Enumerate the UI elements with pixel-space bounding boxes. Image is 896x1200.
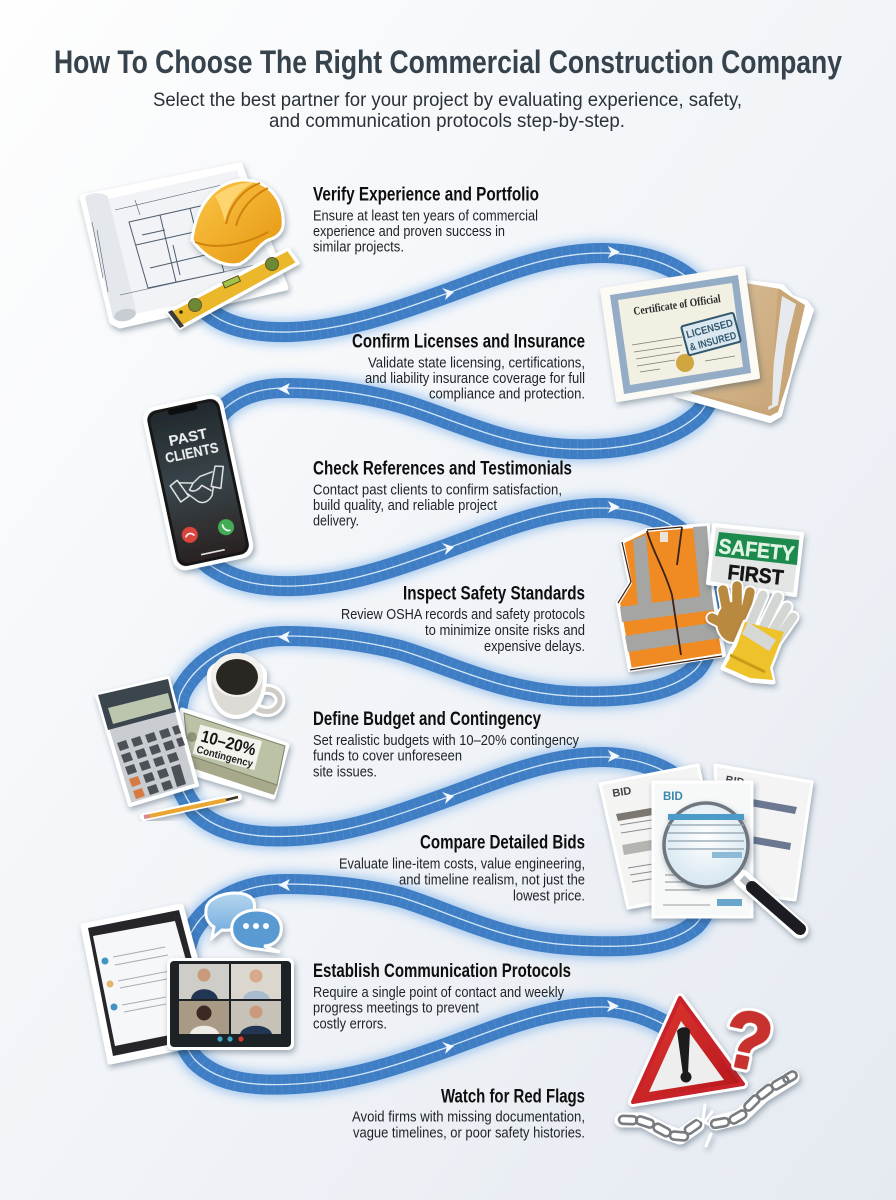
- heading: Inspect Safety Standards: [403, 583, 585, 604]
- safety first sign: [708, 525, 802, 595]
- description: progress meetings to prevent: [313, 1000, 480, 1017]
- handshake: [168, 464, 230, 508]
- safety first sign: FIRST: [726, 561, 785, 590]
- certificate title: Certificate of Official: [633, 293, 721, 318]
- question mark: ?: [716, 992, 780, 1089]
- description: [339, 855, 585, 904]
- question mark: ?: [716, 992, 780, 1089]
- description: lowest price.: [513, 887, 585, 904]
- folders: [675, 282, 812, 421]
- description: funds to cover unforeseen: [313, 748, 462, 765]
- right bid sheet: BID: [725, 774, 745, 789]
- stamp: & INSURED: [688, 330, 738, 354]
- cash stack: [182, 710, 287, 797]
- description: expensive delays.: [484, 638, 585, 655]
- calculator: [97, 678, 197, 805]
- stamp: [681, 313, 741, 355]
- description: [313, 984, 564, 1032]
- contingency label: 10–20%: [199, 727, 258, 759]
- phone text: [160, 424, 220, 467]
- certificate: [602, 268, 758, 400]
- icon: blueprint, hard hat and level: [82, 165, 298, 328]
- description: [313, 481, 562, 529]
- warning triangle: [633, 998, 743, 1102]
- icon: warning sign, question mark and broken chain: [619, 992, 798, 1146]
- left bid sheet: [600, 765, 725, 908]
- description: vague timelines, or poor safety histories.: [353, 1125, 585, 1142]
- heading: Define Budget and Contingency: [313, 709, 541, 730]
- description: [313, 208, 538, 256]
- winding blueprint path: [174, 253, 716, 1085]
- description: [365, 354, 585, 402]
- step 8: red flags: [352, 992, 798, 1146]
- description: Ensure at least ten years of commercial: [313, 208, 538, 225]
- pencil: [144, 797, 238, 817]
- spirit level: [168, 249, 298, 328]
- description: Validate state licensing, certifications,: [368, 354, 585, 371]
- broken chain: [619, 1070, 798, 1146]
- step 4: inspect safety: [341, 525, 802, 682]
- heading: Watch for Red Flags: [441, 1086, 585, 1107]
- right bid sheet: [715, 765, 812, 900]
- step 1: verify experience: [82, 165, 539, 328]
- left bid sheet: BID: [612, 785, 632, 800]
- step 5: define budget: [97, 653, 579, 817]
- description: [341, 606, 585, 655]
- description: Review OSHA records and safety protocols: [341, 606, 585, 623]
- heading: Establish Communication Protocols: [313, 961, 571, 982]
- icon: calculator, coffee, cash and pencil: [97, 653, 287, 817]
- description: build quality, and reliable project: [313, 497, 498, 514]
- subtitle: Select the best partner for your project by evaluating experience, safety,: [153, 89, 742, 111]
- safety first sign: SAFETY: [717, 535, 795, 566]
- description: site issues.: [313, 763, 377, 780]
- description: Avoid firms with missing documentation,: [352, 1109, 585, 1126]
- icon: vest, safety sign and gloves: [618, 525, 802, 682]
- yellow glove: [723, 595, 793, 682]
- heading: Confirm Licenses and Insurance: [352, 331, 585, 352]
- center bid sheet: BID: [663, 791, 683, 803]
- leather glove: [712, 586, 751, 644]
- description: experience and proven success in: [313, 223, 505, 240]
- cash stack: Contingency: [195, 744, 254, 770]
- icon: phone with past clients call: [141, 392, 256, 573]
- path direction arrows: [278, 246, 620, 1054]
- description: Contact past clients to confirm satisfaction,: [313, 481, 562, 498]
- magnifying glass: [664, 803, 800, 930]
- stamp: LICENSED: [685, 317, 735, 341]
- phone text: PAST: [167, 425, 209, 450]
- decline button: [180, 525, 199, 544]
- heading: Check References and Testimonials: [313, 458, 572, 479]
- coffee mug: [209, 653, 280, 717]
- description: Set realistic budgets with 10–20% contingency: [313, 732, 579, 749]
- description: Evaluate line-item costs, value engineering,: [339, 855, 585, 872]
- description: and timeline realism, not just the: [399, 871, 585, 888]
- chat bubbles: [206, 893, 281, 952]
- step 3: check references: [141, 392, 572, 573]
- description: and liability insurance coverage for full: [365, 370, 585, 387]
- hard hat: [192, 180, 283, 265]
- center bid sheet: [653, 782, 752, 917]
- phone text: CLIENTS: [164, 439, 220, 467]
- messaging tablet: [83, 906, 218, 1062]
- description: to minimize onsite risks and: [425, 622, 585, 639]
- step 2: confirm licenses: [352, 268, 812, 421]
- description: [313, 732, 579, 780]
- description: compliance and protection.: [429, 385, 585, 402]
- description: [352, 1109, 585, 1142]
- blueprint sheet: [82, 165, 286, 326]
- step 7: communication: [83, 893, 571, 1062]
- icon: certificate and folders: [602, 268, 812, 421]
- description: costly errors.: [313, 1015, 387, 1032]
- description: delivery.: [313, 512, 359, 529]
- safety vest: [618, 525, 724, 670]
- description: Require a single point of contact and weekly: [313, 984, 564, 1001]
- subtitle: [153, 89, 742, 132]
- video call tablet: [167, 958, 294, 1050]
- icon: bid documents and magnifier: [600, 765, 812, 930]
- description: similar projects.: [313, 239, 404, 256]
- step 6: compare bids: [339, 765, 812, 930]
- heading: Verify Experience and Portfolio: [313, 185, 539, 206]
- icon: tablet, video call and chat bubbles: [83, 893, 294, 1062]
- subtitle: and communication protocols step-by-step.: [269, 110, 625, 132]
- accept button: [217, 518, 235, 537]
- heading: Compare Detailed Bids: [420, 832, 585, 853]
